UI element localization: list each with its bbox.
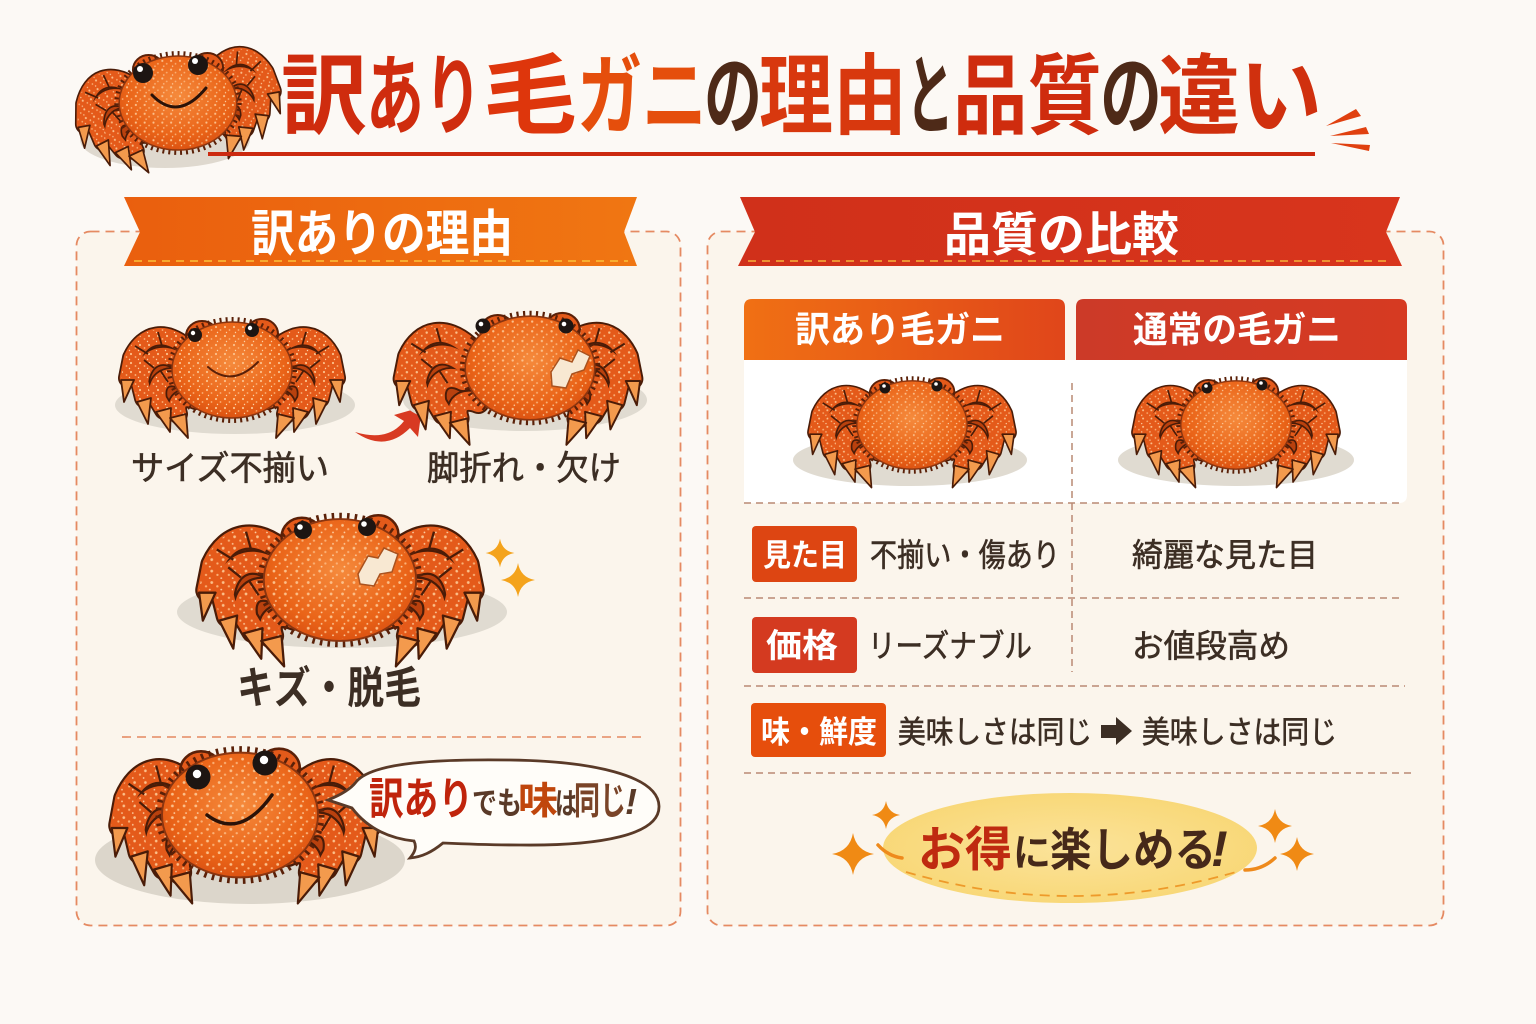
title: 毛 [483, 47, 577, 146]
speech bubble: でも [472, 786, 522, 821]
speech bubble: は [555, 788, 577, 821]
title: 訳 [281, 47, 367, 146]
speech bubble: 味 [518, 781, 558, 823]
title: と [906, 47, 954, 146]
panel: comparison [708, 197, 1444, 926]
crab: smiling mascot [95, 749, 405, 904]
sparkles: callout [832, 801, 1314, 875]
title: の [1100, 47, 1162, 146]
row: price [752, 617, 1290, 673]
row: taste and freshness: 味・鮮度 [761, 715, 877, 750]
label: broken legs: 脚折れ・欠け [427, 450, 621, 488]
arrow: to broken legs [355, 407, 422, 442]
row: taste and freshness: 美味しさは同じ [898, 715, 1092, 750]
title: あり [366, 47, 482, 146]
callout: good value: ! [1211, 821, 1228, 877]
panel: reasons [76, 197, 680, 926]
column header: outlet crab: 訳あり毛ガニ [795, 309, 1005, 350]
row: price: リーズナブル [868, 628, 1032, 664]
row: appearance: 綺麗な見た目 [1132, 537, 1318, 573]
speech bubble: 訳あり [369, 775, 473, 824]
ribbon heading: reasons: 訳ありの理由 [251, 206, 513, 262]
ribbon heading: comparison [738, 197, 1402, 266]
column header: outlet crab [744, 299, 1065, 360]
title: ガニ [577, 47, 707, 146]
row: appearance: 見た目 [763, 538, 847, 573]
title: 違い [1158, 47, 1322, 146]
callout: good value: に [1013, 833, 1051, 875]
row: price: 価格 [766, 627, 838, 664]
title: の [704, 47, 762, 146]
speech bubble [328, 760, 659, 858]
title: 理由 [759, 47, 907, 146]
label: uneven size: サイズ不揃い [131, 450, 329, 488]
crab: broken legs [396, 313, 647, 445]
title [281, 47, 1322, 146]
crab: uneven size [115, 319, 355, 438]
ribbon heading: reasons [124, 197, 637, 266]
row: taste and freshness [751, 703, 1337, 757]
row: appearance: 不揃い・傷あり [870, 537, 1060, 573]
title: 品質 [953, 47, 1102, 146]
speech bubble: 同じ [574, 781, 626, 823]
header mascot crab [70, 46, 289, 183]
callout: good value: お得 [918, 824, 1012, 877]
row: taste and freshness: 美味しさは同じ [1142, 715, 1337, 750]
callout: good value [832, 793, 1314, 903]
ribbon heading: comparison: 品質の比較 [944, 208, 1179, 261]
column header: regular crab [1076, 299, 1407, 360]
crab: outlet [793, 378, 1027, 488]
row: price: お値段高め [1132, 628, 1290, 664]
column header: regular crab: 通常の毛ガニ [1133, 309, 1341, 350]
crab: regular [1118, 378, 1354, 488]
row: appearance [752, 526, 1318, 582]
sparkles [486, 539, 535, 597]
title underline [208, 152, 1315, 156]
speech bubble: ! [625, 781, 637, 822]
arrow: equal taste [1101, 717, 1132, 745]
crab: scratches and hair loss [177, 515, 507, 666]
white image area [744, 360, 1407, 503]
callout: good value: 楽しめる [1050, 824, 1216, 876]
title accent strokes [1326, 109, 1370, 151]
label: scratches and hair loss: キズ・脱毛 [237, 664, 421, 713]
